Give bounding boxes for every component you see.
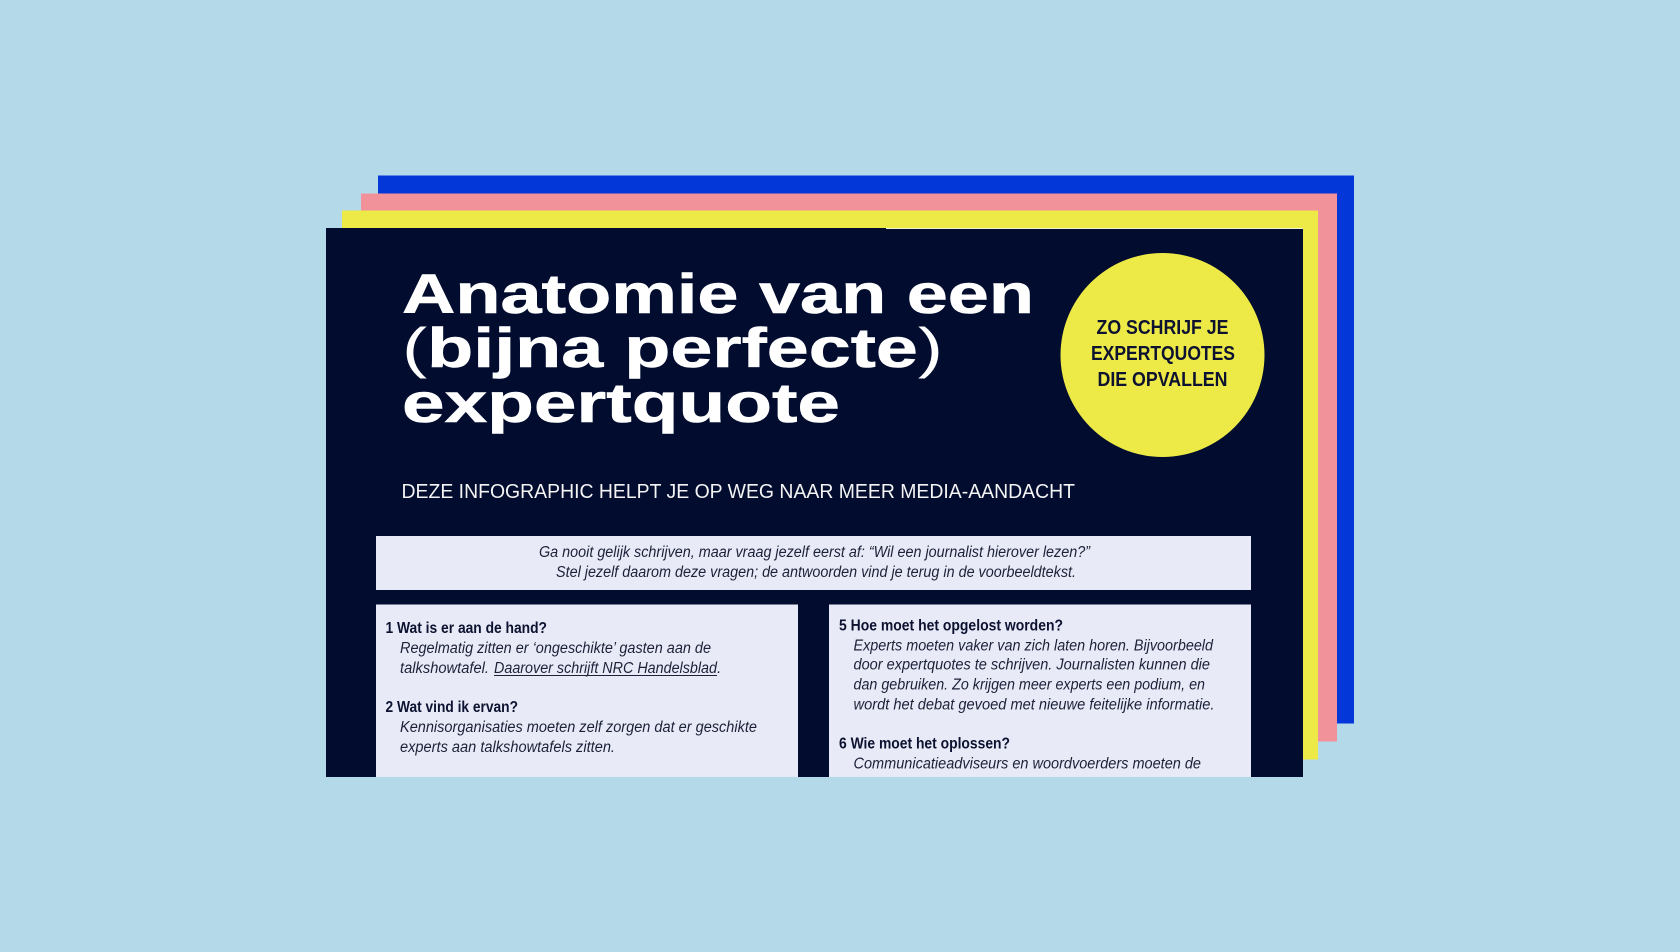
badge: yellow circle — [1060, 253, 1264, 457]
panel: questions 1 and 2 — [376, 604, 798, 777]
question 5: door expertquotes te schrijven. Journalisten kunnen die — [854, 657, 1210, 674]
panel: navy infographic sheet — [326, 228, 1303, 777]
question 5 — [839, 617, 1214, 714]
question 5: wordt het debat gevoed met nieuwe feitelijke informatie. — [854, 696, 1214, 714]
badge: yellow circle: ZO SCHRIJF JE — [1096, 317, 1228, 339]
question 2: 2 Wat vind ik ervan? — [386, 699, 518, 716]
panel: intro — [376, 536, 1251, 590]
title: expertquote — [402, 371, 840, 434]
question 1 — [386, 620, 721, 677]
panel: intro: Stel jezelf daarom deze vragen; de antwoorden vind je terug in de voorbeeldtekst. — [556, 564, 1076, 581]
question 5: 5 Hoe moet het opgelost worden? — [839, 617, 1063, 634]
question 2: experts aan talkshowtafels zitten. — [400, 739, 615, 756]
question 1: Daarover schrijft NRC Handelsblad — [494, 660, 718, 677]
badge: yellow circle: EXPERTQUOTES — [1091, 343, 1235, 365]
question 2: Kennisorganisaties moeten zelf zorgen dat er geschikte — [400, 719, 757, 736]
question 1: Regelmatig zitten er ‘ongeschikte’ gasten aan de — [400, 640, 711, 657]
stacked sheet: yellow — [342, 210, 1318, 760]
question 5: Experts moeten vaker van zich laten horen. Bijvoorbeeld — [854, 637, 1214, 654]
question 6: Communicatieadviseurs en woordvoerders moeten de — [854, 756, 1201, 773]
question 1: 1 Wat is er aan de hand? — [386, 620, 547, 637]
question 2 — [386, 699, 757, 756]
subtitle: DEZE INFOGRAPHIC HELPT JE OP WEG NAAR MEER MEDIA-AANDACHT — [402, 481, 1075, 503]
title: (bijna perfecte ) — [402, 316, 943, 379]
question 5: dan gebruiken. Zo krijgen meer experts een podium, en — [854, 676, 1205, 694]
panel: intro: Ga nooit gelijk schrijven, maar vraag jezelf eerst af: “Wil een journalist hierover lezen?” — [539, 544, 1091, 561]
badge: yellow circle: DIE OPVALLEN — [1098, 369, 1228, 391]
question 1: talkshowtafel. — [400, 660, 489, 677]
stacked sheet: blue — [378, 176, 1354, 724]
question 6: 6 Wie moet het oplossen? — [839, 736, 1010, 752]
title: Anatomie van een — [402, 262, 1034, 325]
panel: questions 5 and 6 — [829, 604, 1251, 777]
question 1: . — [717, 660, 721, 677]
question 6 — [839, 736, 1201, 773]
stacked sheet: pink — [361, 194, 1337, 742]
title — [402, 262, 1034, 434]
